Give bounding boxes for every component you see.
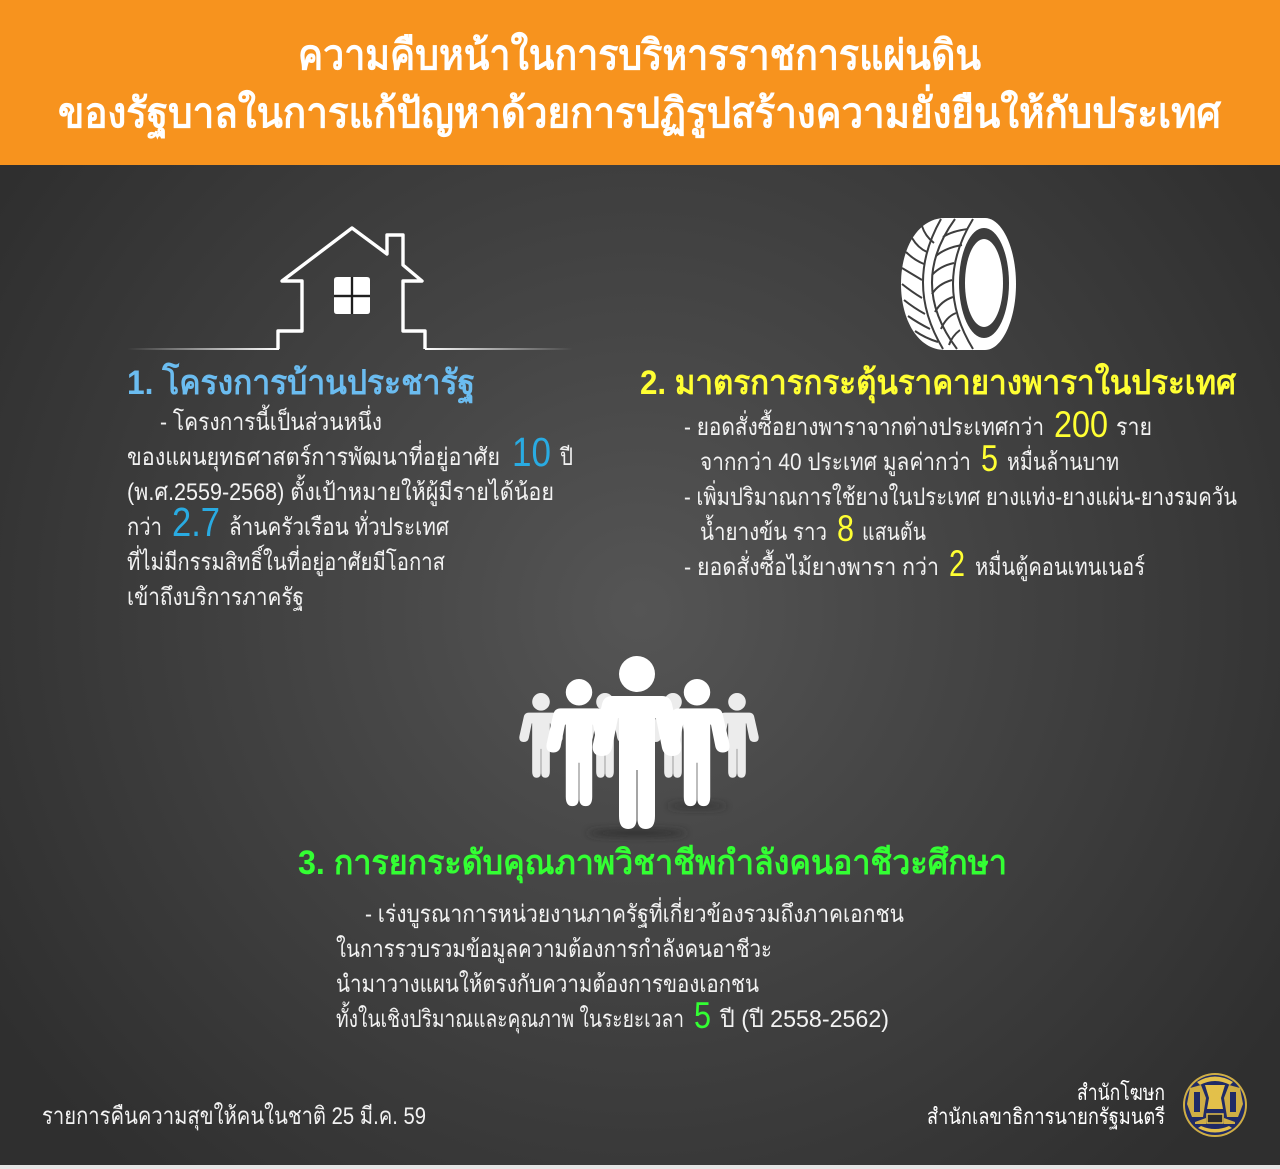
text block: section 2 body: - ยอดสั่งซื้อยางพาราจากต่างประเทศกว่า [684,409,1044,441]
text block: section 1 body: (พ.ศ.2559-2568) ตั้งเป้าหมายให้ผู้มีรายได้น้อย [127,474,554,507]
text block: section 1 body: ล้านครัวเรือน ทั่วประเทศ [229,510,449,541]
icon: tire [901,218,1016,350]
panel: section 3 workforce [298,656,1007,1036]
text block: section 1 body: - โครงการนี้เป็นส่วนหนึ่ง [160,404,382,436]
text block: section 1 body: ที่ไม่มีกรรมสิทธิ์ในที่อยู่อาศัยมีโอกาส [127,544,445,577]
text block: section 3 body: ปี (ปี 2558-2562) [719,1006,889,1033]
text block: section 3 body [336,897,904,1036]
text block: section 1 body: 10 [512,429,551,475]
text block: section 1 body: ปี [559,444,573,471]
icon: house [127,228,573,349]
header banner [0,0,1280,165]
icon: people [519,656,759,836]
text block: section 1 body: เข้าถึงบริการภาครัฐ [127,584,304,611]
text block: section 2 body: น้ำยางข้น ราว [700,514,827,546]
text block: section 2 body: จากกว่า 40 ประเทศ มูลค่ากว่า [700,449,971,477]
title: ความคืบหน้าในการบริหารราชการแผ่นดิน [298,31,981,78]
panel: section 2 rubber [640,218,1237,584]
text block: section 1 body: ของแผนยุทธศาสตร์การพัฒนาที่อยู่อาศัย [127,440,500,472]
text block: section 2 body: 2 [949,543,965,584]
text block: section 2 body: 8 [837,508,854,549]
text block: section 1 body [127,404,573,611]
text block: section 1 body: กว่า [127,514,162,541]
title [58,31,1222,140]
bottom edge strip [0,1165,1280,1169]
text block: section 3 body: ในการรวบรวมข้อมูลความต้องการกำลังคนอาชีวะ [336,935,772,964]
text block: section 2 body: 5 [981,438,998,479]
icon: government seal [1183,1073,1247,1137]
text block: section 2 body: หมื่นล้านบาท [1007,445,1119,476]
footer: issuing office: สำนักโฆษก [1077,1080,1165,1105]
text block: section 3 body: นำมาวางแผนให้ตรงกับความต้องการของเอกชน [336,970,759,998]
footer: issuing office: สำนักเลขาธิการนายกรัฐมนตรี [927,1104,1165,1130]
text block: section 2 body: 200 [1054,404,1108,445]
text block: section 2 body: - ยอดสั่งซื้อไม้ยางพารา กว่า [684,549,939,581]
panel: section 1 housing [127,228,573,611]
footer: broadcast note: รายการคืนความสุขให้คนในชาติ 25 มี.ค. 59 [42,1102,426,1131]
text block: section 2 body [684,404,1237,584]
heading: section 2: 2. มาตรการกระตุ้นราคายางพาราในประเทศ [640,362,1236,404]
heading: section 1: 1. โครงการบ้านประชารัฐ [127,362,475,405]
title: ของรัฐบาลในการแก้ปัญหาด้วยการปฏิรูปสร้างความยั่งยืนให้กับประเทศ [58,84,1222,140]
text block: section 1 body: 2.7 [172,499,220,545]
text block: section 2 body: แสนตัน [862,519,926,546]
footer: issuing office [927,1080,1165,1130]
text block: section 3 body: 5 [694,995,711,1036]
heading: section 3: 3. การยกระดับคุณภาพวิชาชีพกำลังคนอาชีวะศึกษา [298,844,1007,884]
text block: section 3 body: - เร่งบูรณาการหน่วยงานภาครัฐที่เกี่ยวข้องรวมถึงภาคเอกชน [365,897,904,929]
text block: section 2 body: ราย [1116,414,1152,441]
text block: section 2 body: หมื่นตู้คอนเทนเนอร์ [975,550,1145,582]
text block: section 3 body: ทั้งในเชิงปริมาณและคุณภาพ ในระยะเวลา [336,1001,684,1034]
